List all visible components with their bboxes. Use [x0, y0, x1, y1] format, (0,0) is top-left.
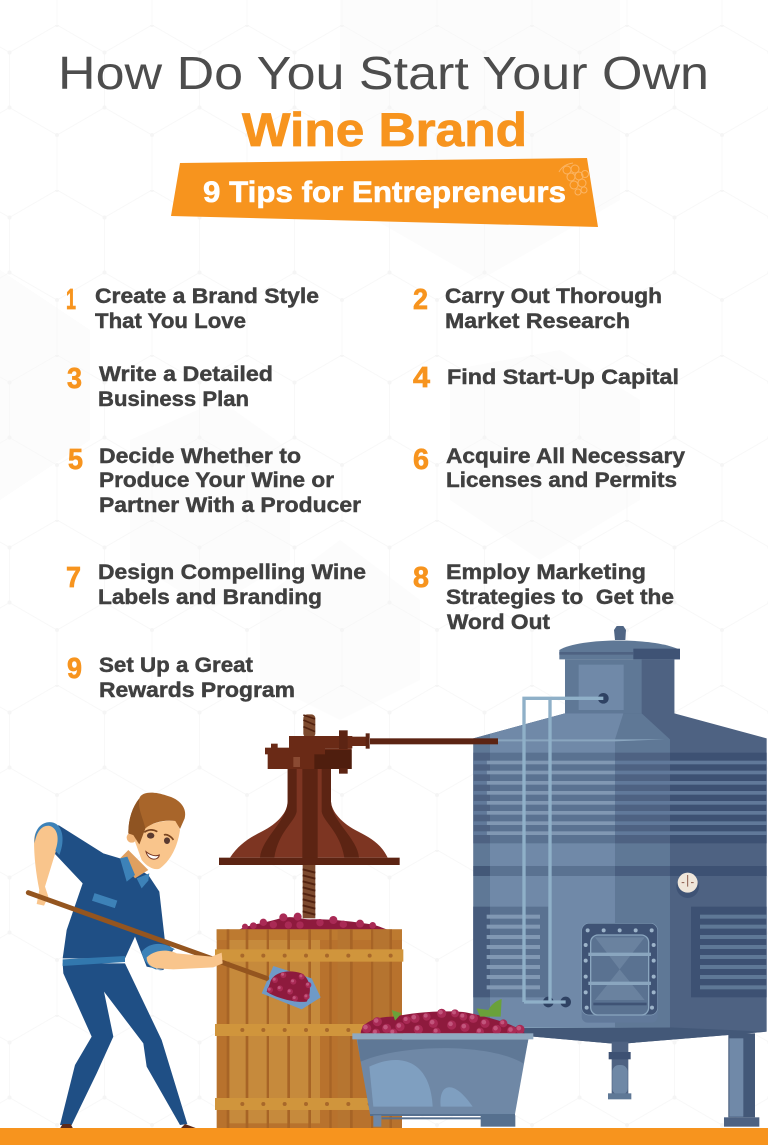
shovel with grapes [262, 966, 321, 1009]
tip 3: Write a Detailed [99, 363, 273, 386]
tip 9 [67, 653, 295, 702]
worker [28, 793, 267, 1129]
shoulder cuff [35, 822, 63, 855]
ground strip [0, 1128, 768, 1145]
tip 5: Produce Your Wine or [99, 469, 334, 492]
tip 8: Strategies to Get the [446, 586, 674, 609]
boots [60, 1124, 198, 1129]
tip 8 [413, 561, 674, 634]
tank legs [608, 1033, 759, 1127]
tip 6: Licenses and Permits [446, 469, 677, 492]
banner: 9 tips for entrepreneurs: 9 Tips for Entrepreneurs [203, 176, 566, 209]
tip 8: 8 [413, 562, 429, 594]
tip 3: 3 [67, 363, 82, 395]
tip 1: Create a Brand Style [95, 285, 319, 308]
tip 7: Labels and Branding [98, 586, 322, 609]
barrel grapes [239, 913, 388, 930]
tip 7: 7 [66, 562, 81, 594]
forearm [147, 951, 223, 969]
tip 6: Acquire All Necessary [446, 445, 685, 468]
tip 2: 2 [413, 284, 428, 316]
press screw [303, 865, 315, 918]
tip 1 [66, 284, 319, 333]
title: Wine Brand [242, 103, 527, 156]
tip 2 [413, 284, 662, 333]
tip 9: 9 [67, 653, 82, 685]
shirt pocket [92, 893, 117, 908]
tip 4: Find Start-Up Capital [447, 366, 679, 389]
tip 1: 1 [66, 284, 76, 316]
trousers [60, 963, 187, 1125]
tip 2: Market Research [445, 310, 630, 333]
elbow cuff [142, 944, 175, 970]
tip 8: Word Out [447, 611, 550, 634]
tip 4 [413, 362, 679, 394]
barrel hoops [215, 949, 403, 1110]
raised arm [34, 825, 58, 906]
tip 6: 6 [413, 444, 429, 476]
pipes [524, 693, 609, 1007]
banner: 9 tips for entrepreneurs [171, 158, 598, 227]
tip 3: Business Plan [98, 388, 249, 411]
grape cart [352, 999, 533, 1127]
tip 2: Carry Out Thorough [445, 285, 662, 308]
title [58, 47, 709, 156]
tip 5: Partner With a Producer [99, 494, 361, 517]
title: How Do You Start Your Own [58, 47, 709, 99]
shovel handle [28, 893, 267, 978]
pressure gauge [676, 873, 699, 898]
tip 9: Set Up a Great [99, 654, 253, 677]
tip 5 [68, 444, 361, 517]
belt [63, 956, 125, 966]
tip 9: Rewards Program [99, 679, 295, 702]
tip 8: Employ Marketing [446, 561, 646, 584]
tip 3 [67, 363, 273, 411]
wine tank [473, 626, 767, 1127]
tip 1: That You Love [95, 310, 246, 333]
wine press [219, 714, 498, 865]
tip 7: Design Compelling Wine [98, 561, 366, 584]
wooden barrel [215, 929, 403, 1129]
tip 6 [413, 444, 685, 492]
vent panel right [691, 907, 767, 997]
tip 5: Decide Whether to [99, 445, 301, 468]
shirt [55, 825, 173, 970]
vent panel left [473, 907, 548, 997]
tank door [582, 923, 658, 1023]
tip 4: 4 [413, 362, 430, 394]
head [120, 793, 185, 888]
tip 5: 5 [68, 444, 83, 476]
tip 7 [66, 561, 366, 609]
